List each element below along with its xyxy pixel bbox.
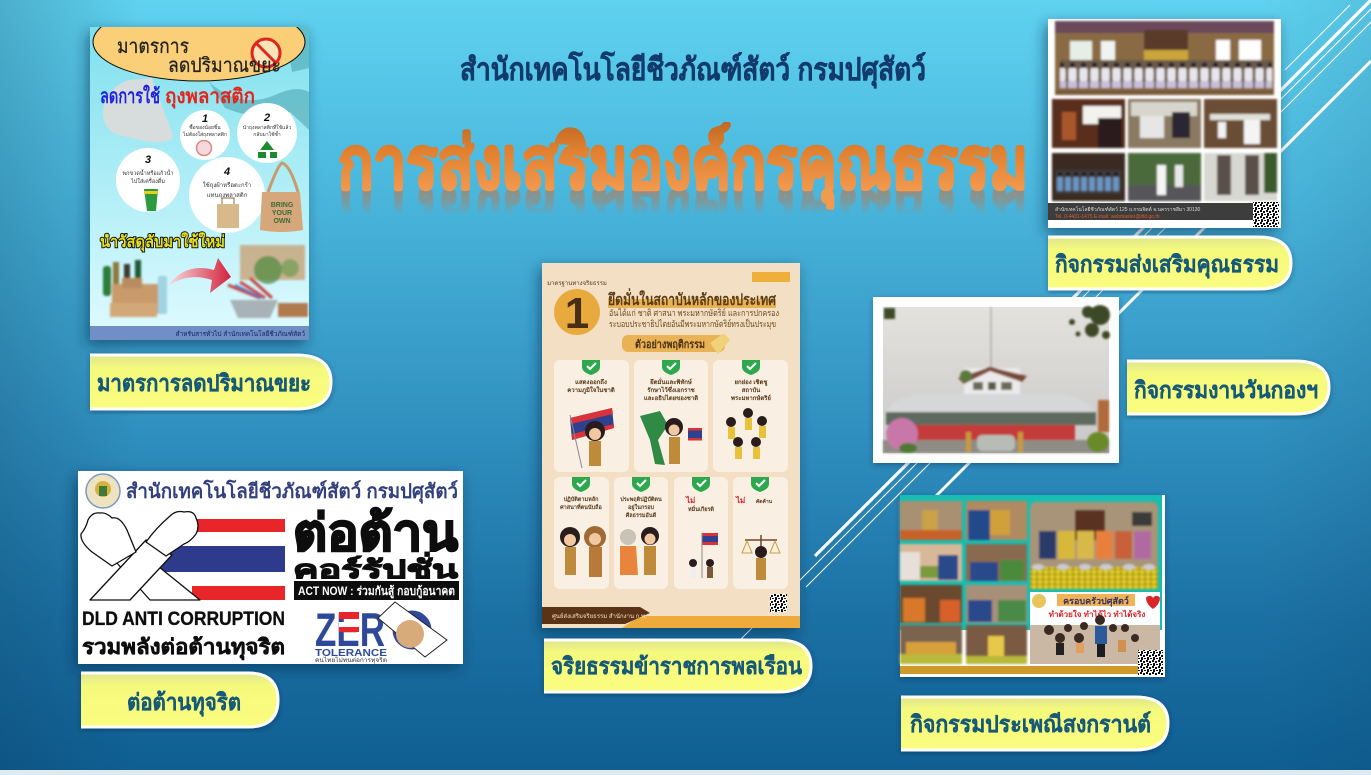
poster: waste reduction: มาตรการ xyxy=(117,36,189,58)
card 4: ศาสนาที่ตนนับถือ xyxy=(560,503,602,511)
callout: civil servant ethics xyxy=(544,640,811,692)
footer band xyxy=(90,326,309,340)
card 6: ไม่ xyxy=(685,495,695,505)
zero tolerance logo: TOLERANCE xyxy=(315,648,387,659)
crossed arms xyxy=(81,512,200,600)
photo collage: morality activity: Tel. 0-4431-1475 E-mail: webmaster@dld.go.th xyxy=(1055,214,1160,220)
circle 1: ซื้อของน้อยชิ้น xyxy=(189,122,221,131)
callout: department day xyxy=(1127,361,1329,414)
building xyxy=(964,368,1020,394)
footer: ศูนย์ส่งเสริมจริยธรรม สำนักงาน ก.พ. xyxy=(552,612,647,620)
poster: waste reduction: ลดปริมาณขยะ xyxy=(168,55,281,77)
department name: สำนักเทคโนโลยีชีวภัณฑ์สัตว์ กรมปศุสัตว์ xyxy=(126,479,458,504)
circle 3: พกขวดน้ำหรือแก้วน้ำ xyxy=(123,169,173,177)
footer xyxy=(542,594,800,628)
trees xyxy=(884,305,1110,339)
card 1: แสดงออกถึง xyxy=(575,378,607,386)
photo collage: morality activity xyxy=(1048,19,1281,228)
circle 3: ไปใส่เครื่องดื่ม xyxy=(130,177,165,185)
card 5: ศีลธรรมอันดี xyxy=(625,512,657,519)
logo xyxy=(752,272,790,282)
card 7: ไม่ xyxy=(735,495,745,505)
big text: oppose: ต่อต้าน xyxy=(293,505,458,561)
number badge: 1 xyxy=(565,289,589,338)
pill: ตัวอย่างพฤติกรรม xyxy=(635,338,705,351)
arrow xyxy=(168,258,231,293)
card 2: และอธิปไตยของชาติ xyxy=(644,394,698,402)
act now band xyxy=(294,581,459,600)
circle 4: แทนถุงพลาสติก xyxy=(207,192,248,199)
circle 1: ไม่ต้องใส่ถุงพลาสติก xyxy=(182,131,227,138)
card 3 xyxy=(713,360,788,472)
small photos row 2 xyxy=(1052,153,1277,201)
zero tolerance logo xyxy=(315,602,447,664)
circle 3: 3 xyxy=(145,154,151,166)
poster: civil servant ethics xyxy=(542,263,800,628)
card 1 xyxy=(554,360,629,472)
poster: waste reduction xyxy=(90,3,309,340)
header ellipse xyxy=(92,27,306,82)
main group photo xyxy=(1055,21,1274,95)
map decoration xyxy=(209,27,309,130)
circle 1: 1 xyxy=(202,113,208,125)
decorative diagonal lines xyxy=(700,0,1371,680)
family poster xyxy=(1030,592,1160,664)
number sculpture xyxy=(977,435,1015,451)
heading: reuse materials: นำวัสดุลับมาใช้ใหม่ xyxy=(100,232,225,252)
bottles and boxes xyxy=(103,260,167,317)
callout: waste reduction xyxy=(90,355,331,409)
number badge: มาตรฐานทางจริยธรรม xyxy=(547,280,607,287)
flower beds xyxy=(886,418,918,450)
callout: anti-corruption xyxy=(81,673,278,727)
card 4 xyxy=(554,477,609,589)
card 1: ความภูมิใจในชาติ xyxy=(567,386,615,395)
white plastic bag xyxy=(103,78,173,142)
callout: civil servant ethics: จริยธรรมข้าราชการพลเรือน xyxy=(551,653,802,679)
callout: department day: กิจกรรมงานวันกองฯ xyxy=(1134,377,1318,403)
heading: reduce plastic bags: ลดการใช้ xyxy=(100,84,160,108)
callout: Songkran xyxy=(901,697,1168,750)
family poster: ครอบครัวปศุสัตว์ xyxy=(1063,595,1129,607)
zero tolerance logo: คนไทยไม่ทนต่อการทุจริต xyxy=(315,656,387,664)
circle 2: 2 xyxy=(263,112,270,124)
description: ระบอบประชาธิปไตยอันมีพระมหากษัตริย์ทรงเป็นประมุข xyxy=(609,317,776,330)
ground xyxy=(883,440,1109,453)
banner: anti-corruption: คอร์รัปชั่น xyxy=(293,552,458,584)
circle 4 xyxy=(189,157,265,233)
Thai flag xyxy=(160,519,285,600)
tent xyxy=(886,394,1096,414)
callout: Songkran: กิจกรรมประเพณีสงกรานต์ xyxy=(910,711,1151,737)
flag pole xyxy=(990,307,992,370)
tote bag: OWN xyxy=(273,218,291,225)
card 6 xyxy=(674,477,728,589)
callout: morality activity: กิจกรรมส่งเสริมคุณธรรม xyxy=(1055,251,1279,279)
poster: waste reduction: สำหรับสารทั่วไป สำนักเทคโนโลยีชีวภัณฑ์สัตว์ xyxy=(176,329,305,338)
info band xyxy=(1048,203,1267,220)
emblem xyxy=(86,474,120,508)
card 3: ยกย่อง เชิดชู xyxy=(735,378,767,387)
subtitle: department name: สำนักเทคโนโลยีชีวภัณฑ์สัตว์ กรมปศุสัตว์ xyxy=(460,51,926,89)
tote bag: YOUR xyxy=(272,210,292,217)
slogan: รวมพลังต่อต้านทุจริต xyxy=(82,635,285,661)
left photo cells xyxy=(900,501,1027,664)
card 7 xyxy=(733,477,788,589)
description xyxy=(609,307,779,330)
recycled crafts xyxy=(228,245,308,318)
icon: no plastic bag xyxy=(252,39,280,67)
circle 1 xyxy=(180,110,230,160)
card 3: พระมหากษัตริย์ xyxy=(731,394,771,402)
act now band: ACT NOW : ร่วมกันสู้ กอบกู้อนาคต xyxy=(298,584,455,599)
photo collage: Songkran xyxy=(900,495,1165,677)
heading xyxy=(608,288,777,309)
card 5: ประพฤติปฏิบัติตน xyxy=(620,495,662,503)
callout: anti-corruption: ต่อต้านทุจริต xyxy=(127,689,241,717)
card 2: รักษาไว้ซึ่งเอกราช xyxy=(647,385,695,394)
card 6: หมิ่นเกียรติ xyxy=(688,505,714,513)
bottom strip xyxy=(900,666,1140,674)
QR code xyxy=(1253,202,1279,227)
circle 4: ใช้ถุงผ้าหรือตะกร้า xyxy=(203,181,251,189)
card 7: คัดค้าน xyxy=(756,498,773,505)
card 2 xyxy=(634,360,708,472)
slogan: DLD ANTI CORRUPTION xyxy=(82,609,285,630)
slogan xyxy=(82,609,285,661)
card 2: ยึดมั่นและพิทักษ์ xyxy=(650,377,692,386)
banner: anti-corruption xyxy=(78,471,463,664)
zero tolerance logo: ZER xyxy=(315,603,385,656)
poster: waste reduction: ถุงพลาสติก xyxy=(165,86,255,109)
card 5 xyxy=(614,477,668,589)
heading: ยึดมั่นในสถาบันหลักของประเทศ xyxy=(608,288,777,309)
photo collage: morality activity: สำนักเทคโนโลยีชีวภัณฑ์สัตว์ 125 ถ.กรมจิตต์ จ.นครราชสีมา 30130 xyxy=(1055,206,1201,213)
small photos row 1 xyxy=(1052,99,1277,148)
circle 2: กลับมาใช้ซ้ำ xyxy=(253,129,281,138)
tote bag: BRING xyxy=(271,202,294,209)
card 3: สถาบัน xyxy=(742,386,761,394)
main title with reflection: การส่งเสริมองค์กรคุณธรรม xyxy=(338,169,1028,255)
number badge xyxy=(547,280,607,338)
circle 4: 4 xyxy=(223,166,230,178)
photo: department day event xyxy=(873,297,1119,463)
callout: waste reduction: มาตรการลดปริมาณขยะ xyxy=(97,370,311,396)
family poster: ทำด้วยใจ ทำได้ไว ทำได้จริง xyxy=(1049,609,1145,619)
main group photo xyxy=(1030,502,1158,589)
circle 2 xyxy=(237,103,297,163)
QR code xyxy=(1138,650,1163,675)
main title with reflection: การส่งเสริมองค์กรคุณธรรม xyxy=(338,123,1028,209)
circle 2: นำถุงพลาสติกที่ใช้แล้ว xyxy=(243,124,291,131)
card 4: ปฏิบัติตามหลัก xyxy=(564,495,599,503)
description: อันได้แก่ ชาติ ศาสนา พระมหากษัตริย์ และการปกครอง xyxy=(609,307,779,318)
card 5: อยู่ในกรอบ xyxy=(628,503,655,512)
circle 3 xyxy=(116,148,180,212)
tote bag xyxy=(260,163,303,232)
callout: morality activity xyxy=(1048,237,1291,289)
pill xyxy=(622,333,730,354)
